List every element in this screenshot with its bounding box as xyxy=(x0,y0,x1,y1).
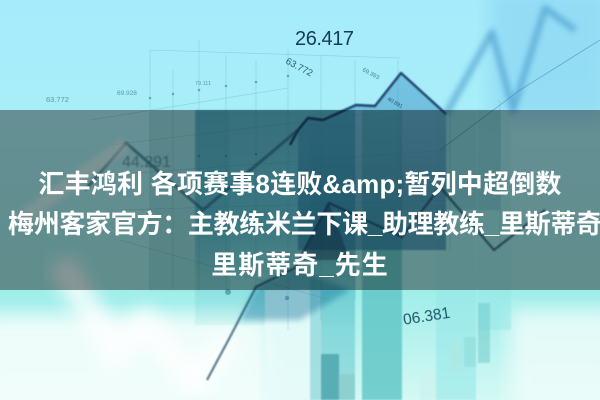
label 79.111: 79.111 xyxy=(195,81,211,87)
lower dark line xyxy=(207,187,545,380)
label 63.772 left: 63.772 xyxy=(46,95,69,104)
blurred left line xyxy=(85,130,298,210)
label 26.417: 26.417 xyxy=(295,28,354,50)
grid lines xyxy=(90,40,500,330)
label 69.928: 69.928 xyxy=(117,90,137,97)
label 44.291: 44.291 xyxy=(122,154,171,171)
label 40.891: 40.891 xyxy=(386,97,404,110)
filled area under main line xyxy=(298,73,446,250)
main dark trend line xyxy=(290,73,446,145)
translucent title band xyxy=(0,110,600,290)
label 69.393: 69.393 xyxy=(361,67,381,82)
blurred white zigzag line xyxy=(60,262,230,383)
label 63.772: 63.772 xyxy=(284,56,314,79)
chart number labels xyxy=(46,28,451,329)
title line 3: 里斯蒂奇_先生 xyxy=(211,250,389,280)
grid nodes xyxy=(149,75,289,300)
vertical bars xyxy=(150,110,511,400)
title line 2: 梅州客家官方：主教练米兰下课_助理教练_里斯蒂奇 xyxy=(8,209,600,239)
label 06.381: 06.381 xyxy=(402,305,451,329)
blue upward line xyxy=(446,8,575,114)
title line 1: 汇丰鸿利 各项赛事8连败&amp;暂列中超倒数 xyxy=(38,169,562,199)
